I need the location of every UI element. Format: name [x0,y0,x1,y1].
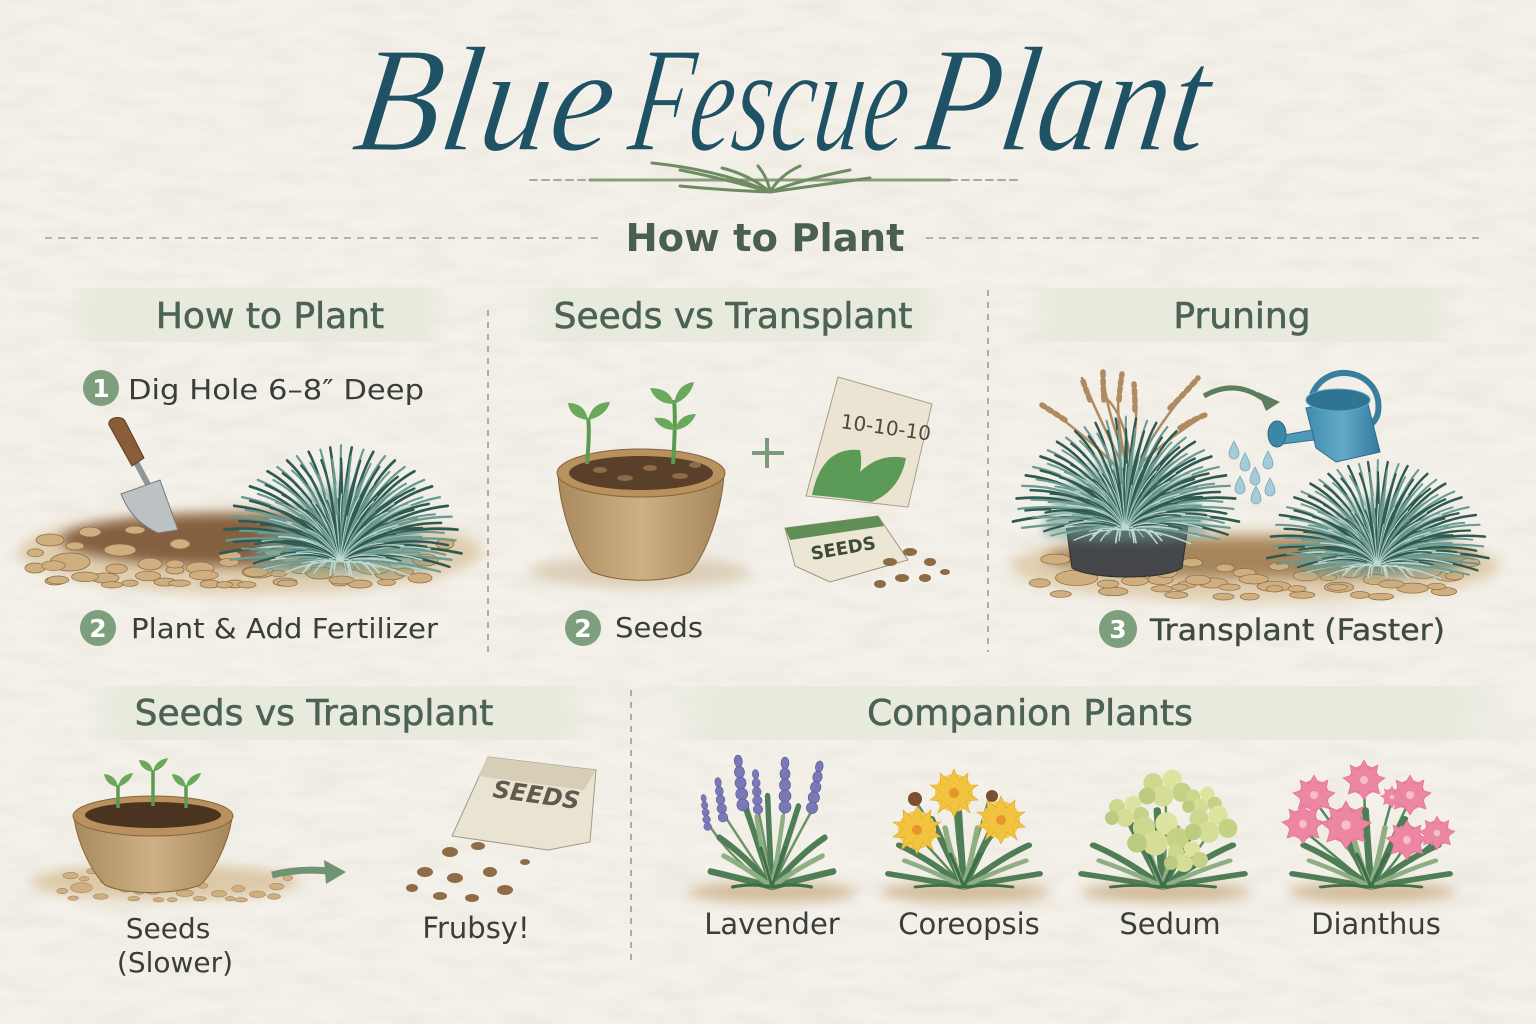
ornamental seed stalks [1042,372,1205,470]
plant: sedum [1082,770,1244,887]
soil bed [1010,530,1500,602]
title: Blue [345,17,627,183]
panel: how to plant [18,288,482,646]
heading: seeds vs transplant: Seeds vs Transplant [554,296,912,337]
soil bed [18,510,482,594]
heading: pruning: Pruning [1173,296,1311,337]
black nursery pot [1066,525,1188,577]
step 2 seeds label [565,610,703,646]
heading: companion plants: Companion Plants [867,693,1193,734]
potted seedlings [73,758,233,892]
plant labels [704,907,1441,941]
seed packet [452,757,596,850]
step 2 label: 2 [89,614,107,643]
plant labels: Dianthus [1311,907,1441,941]
title: Fescue [621,17,921,183]
arrow [272,860,346,884]
heading: companion plants [645,686,1525,740]
icon: watering can [1268,373,1380,462]
icon: trowel [109,418,178,533]
title grass ornament [530,163,1020,192]
heading: pruning [1020,288,1464,342]
heading: seeds vs transplant [518,288,952,342]
step 3 label: Transplant (Faster) [1149,613,1445,647]
panel: companion plants [645,686,1525,941]
plant labels: Sedum [1119,907,1221,941]
label seeds slower [117,912,233,979]
step 1 label: 1 [92,374,110,403]
arrow [1204,388,1280,411]
title: Plant [909,17,1223,183]
label seeds slower: (Slower) [117,946,233,979]
panel: seeds vs transplant [518,288,952,646]
step 3 label [1099,610,1445,648]
plant: dianthus [1282,760,1455,887]
step 3 label: 3 [1109,615,1127,644]
plant labels: Coreopsis [898,907,1040,941]
label seeds slower: Seeds [126,912,210,945]
plus sign [752,438,784,468]
heading: how to plant [62,288,454,342]
step 2 seeds label: 2 [574,614,592,643]
plant labels: Lavender [704,907,840,941]
divider [488,290,988,962]
heading: seeds vs transplant [78,686,602,740]
seed packet [785,516,950,588]
potted seedlings [530,382,750,588]
soil under pot [30,864,300,902]
blue fescue plant [220,445,462,586]
fertilizer bag [806,377,933,507]
fertilizer bag: 10-10-10 [839,409,933,446]
heading: seeds vs transplant: Seeds vs Transplant [135,693,493,734]
step 2 label: Plant & Add Fertilizer [131,612,439,645]
seed packet: SEEDS [491,775,581,815]
title [345,17,1223,183]
fescue after pruning [1267,460,1489,588]
section heading: How to Plant: How to Plant [625,216,905,261]
panel: pruning [1010,288,1500,648]
seed packet: SEEDS [809,533,877,565]
step 2 seeds label: Seeds [615,611,703,644]
heading: how to plant: How to Plant [156,296,384,337]
label frubsy: Frubsy! [422,911,530,945]
overgrown fescue [1013,416,1239,554]
panel: seeds vs transplant lower [30,686,602,979]
plant: lavender [699,755,834,887]
plant: coreopsis [888,769,1040,887]
soil strip [687,882,1457,902]
water droplets [1229,441,1275,504]
scattered seeds [406,842,530,902]
step 1 label: Dig Hole 6–8″ Deep [128,373,424,406]
